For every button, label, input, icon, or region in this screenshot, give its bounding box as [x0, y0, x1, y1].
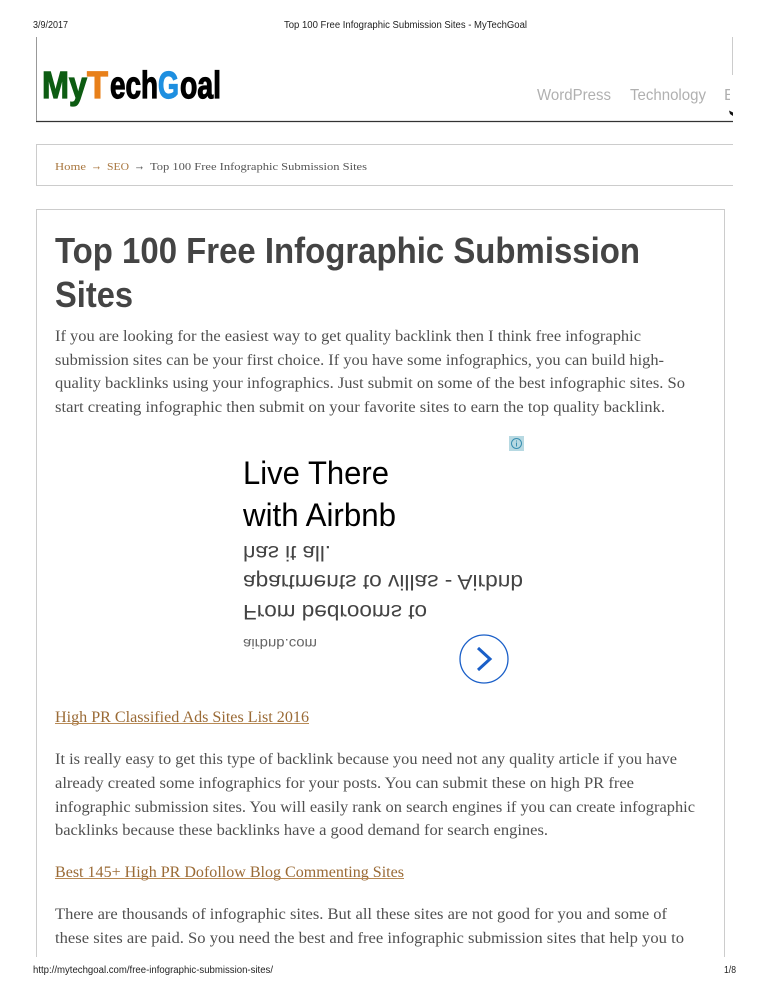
site header — [36, 37, 742, 122]
navigation: Technology — [630, 87, 706, 104]
intro paragraph — [55, 328, 685, 416]
print header: Top 100 Free Infographic Submission Sites - MyTechGoal — [284, 20, 527, 31]
print footer — [33, 965, 736, 976]
logo — [42, 65, 221, 107]
paragraph: backlinks — [55, 751, 695, 839]
paragraph: backlinks: It is really easy to get this type of backlink because you need not any quality article if you have — [55, 751, 677, 768]
intro paragraph: quality backlinks using your infographics. Just submit on some of the best infographic sites. So — [55, 375, 685, 392]
navigation — [537, 76, 742, 116]
print footer: 1/8 — [724, 965, 736, 976]
flipped ad copy: From bedrooms to — [243, 600, 427, 623]
paragraph: backlinks: already created some infographics for your posts. You can submit these on high PR free — [55, 775, 634, 792]
ad headline: with Airbnb — [242, 497, 396, 533]
logo: ech — [110, 65, 158, 107]
article card — [36, 210, 724, 957]
paragraph: backlinks: backlinks because these backlinks have a good demand for search engines. — [55, 822, 548, 839]
paragraph: thousands of sites — [55, 906, 684, 947]
breadcrumb: SEO — [107, 161, 129, 173]
breadcrumb: → — [134, 158, 145, 173]
title — [55, 230, 640, 315]
icon: ad info — [509, 436, 524, 451]
flipped ad copy — [243, 541, 523, 652]
logo: G — [158, 65, 179, 107]
flipped ad copy: apartments to villas - Airbnb — [243, 570, 523, 593]
link: classified ads: High PR Classified Ads Sites List 2016 — [55, 709, 309, 726]
intro paragraph: submission sites can be your first choice. If you have some infographics, you can build high- — [55, 352, 664, 369]
paragraph: thousands of sites: There are thousands of infographic sites. But all these sites are not good for you and some of — [55, 906, 668, 923]
flipped ad copy: airbnb.com — [243, 636, 317, 652]
intro paragraph: start creating infographic then submit on your favorite sites to earn the top quality backlink. — [55, 399, 665, 416]
logo: oal — [180, 65, 221, 107]
intro paragraph: If you are looking for the easiest way to get quality backlink then I think free infographic — [55, 328, 641, 345]
paragraph: thousands of sites: these sites are paid. So you need the best and free infographic submission sites that help you to — [55, 930, 684, 947]
logo: T — [87, 65, 108, 107]
ad headline: Live There — [243, 455, 389, 491]
print header: 3/9/2017 — [33, 20, 68, 31]
print header — [33, 20, 527, 31]
logo: My — [42, 65, 87, 107]
breadcrumb: → — [91, 158, 102, 173]
link: blog commenting: Best 145+ High PR Dofollow Blog Commenting Sites — [55, 864, 404, 881]
icon: arrow button — [460, 635, 508, 683]
navigation: E — [724, 87, 735, 104]
flipped ad copy: has it all. — [243, 541, 331, 564]
title: Top 100 Free Infographic Submission — [55, 230, 640, 271]
navigation: WordPress — [537, 87, 611, 104]
title: Sites — [55, 274, 133, 315]
breadcrumb — [36, 144, 733, 186]
print footer: http://mytechgoal.com/free-infographic-submission-sites/ — [33, 965, 273, 976]
advertisement — [242, 436, 524, 683]
breadcrumb: Home — [55, 161, 86, 173]
ad headline — [242, 455, 396, 533]
breadcrumb: Top 100 Free Infographic Submission Sites — [150, 161, 367, 173]
paragraph: backlinks: infographic submission sites. You will easily rank on search engines if you can create infographic — [55, 799, 695, 816]
